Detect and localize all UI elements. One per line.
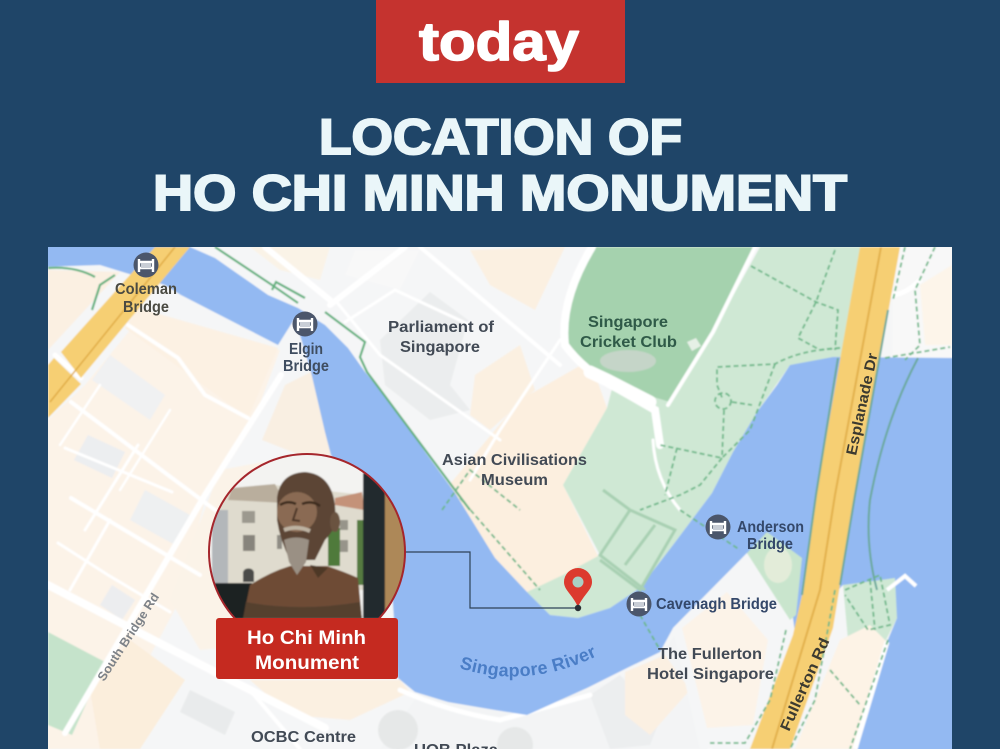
north-west road xyxy=(61,247,190,378)
museum beige xyxy=(445,360,607,592)
place labels xyxy=(115,281,804,749)
dashed park paths xyxy=(442,247,950,749)
map base layers xyxy=(38,237,962,749)
river label: Singapore River xyxy=(460,647,594,680)
place labels: Cricket Club xyxy=(580,334,677,351)
grey blocks in west grid xyxy=(92,355,165,420)
place labels: OCBC Centre xyxy=(251,729,356,746)
river xyxy=(38,237,962,749)
place labels: Museum xyxy=(481,472,548,489)
east bank green xyxy=(843,578,897,642)
north beige and parliament greys xyxy=(470,247,565,310)
place labels: Bridge xyxy=(747,536,793,553)
road labels: South Bridge Rd xyxy=(95,590,162,684)
bridge icon: Elgin xyxy=(292,312,318,336)
white streets xyxy=(48,247,756,749)
callout label: Monument xyxy=(255,652,360,674)
callout label xyxy=(216,618,398,679)
place labels: Coleman xyxy=(115,281,177,298)
solid park walkways xyxy=(48,247,470,510)
place labels: Parliament of xyxy=(388,319,495,336)
road labels: Esplanade Dr xyxy=(843,351,882,457)
place labels: Singapore xyxy=(400,339,480,356)
road edge lines xyxy=(802,358,838,595)
bust head xyxy=(277,472,336,560)
west beige blocks xyxy=(48,330,280,749)
south beige and greys xyxy=(90,640,185,749)
bridge icon: Cavenagh xyxy=(626,592,652,616)
west green lawn xyxy=(48,632,105,735)
place labels: Bridge xyxy=(283,358,329,375)
photo: monument bust xyxy=(208,453,406,618)
bridge icon: Anderson xyxy=(706,514,730,540)
panel: map xyxy=(48,247,952,749)
logo: today xyxy=(376,0,625,83)
place labels: Hotel Singapore xyxy=(647,666,774,683)
place labels: Elgin xyxy=(289,341,323,358)
road labels: Fullerton Rd xyxy=(777,635,833,734)
bridge icon: Coleman xyxy=(134,252,158,278)
place labels: Bridge xyxy=(123,299,169,316)
lawn tip xyxy=(747,532,802,620)
title: HO CHI MINH MONUMENT xyxy=(153,165,847,221)
title xyxy=(153,109,847,221)
south-east bank land xyxy=(678,618,795,748)
title: LOCATION OF xyxy=(319,109,682,165)
place labels: Asian Civilisations xyxy=(442,452,587,469)
place labels: The Fullerton xyxy=(658,646,762,663)
bust shoulders xyxy=(243,566,362,619)
cricket club dark green xyxy=(563,247,753,402)
connector line xyxy=(404,552,578,608)
place labels: Anderson xyxy=(737,519,804,536)
road labels xyxy=(95,351,882,734)
place labels: Singapore xyxy=(588,314,668,331)
logo: today: today xyxy=(419,12,579,72)
cricket pavilion xyxy=(600,350,656,372)
pier xyxy=(887,576,916,590)
park light green xyxy=(527,247,860,618)
place labels: Cavenagh Bridge xyxy=(656,596,777,613)
esplanade road xyxy=(750,247,900,749)
icon: location pin xyxy=(564,568,592,611)
callout label: Ho Chi Minh xyxy=(247,627,366,649)
